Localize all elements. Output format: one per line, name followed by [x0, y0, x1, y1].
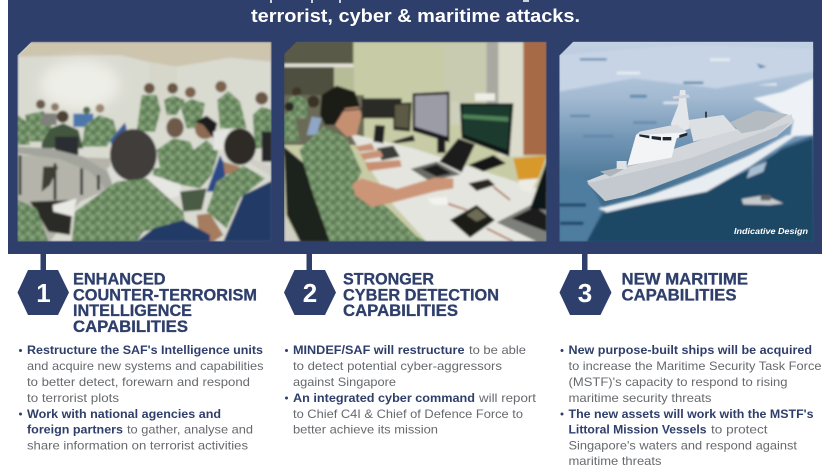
bullet text 1: to better detect, forewarn and respond [27, 375, 250, 389]
bullet text 3: to increase the Maritime Security Task Force [568, 359, 822, 373]
icon: hexagon number 1: 1 [36, 278, 51, 308]
bullet text 2: to Chief C4I & Chief of Defence Force to [293, 407, 523, 421]
icon: hexagon number 2 [284, 254, 336, 315]
bullet text 1: to gather, analyse and [127, 422, 253, 436]
bullet text 2: against Singapore [293, 375, 396, 389]
heading 2: STRONGER [343, 270, 434, 288]
photo: intelligence briefing room [17, 42, 272, 242]
heading 1: INTELLIGENCE [73, 302, 192, 320]
bullet text 2: better achieve its mission [293, 422, 438, 436]
bullet text 2: to detect potential cyber-aggressors [293, 359, 502, 373]
section 1: counter-terrorism intelligence [18, 254, 264, 452]
heading 2: CYBER DETECTION [343, 286, 499, 304]
bullet text 1 [19, 343, 264, 452]
bullet text 2 [285, 343, 537, 436]
bullet text 1: to terrorist plots [27, 391, 119, 405]
bullet text 2: MINDEF/SAF will restructure [293, 343, 465, 357]
bullet text 1: share information on terrorist activities [27, 438, 248, 452]
bullet text 1: and acquire new systems and capabilities [27, 359, 264, 373]
heading 2 [343, 270, 499, 320]
bullet text 3: The new assets will work with the MSTF's [568, 407, 814, 421]
bullet text 2: to be able [469, 343, 526, 357]
bullet text 3: (MSTF)'s capacity to respond to rising [568, 375, 788, 389]
icon: hexagon number 3 [560, 254, 612, 315]
heading 3 [622, 270, 748, 304]
bullet text 2: An integrated cyber command [293, 391, 475, 405]
heading 1: COUNTER-TERRORISM [73, 286, 257, 304]
caption: Indicative Design: Indicative Design [734, 226, 808, 236]
bullet text 3: maritime threats [568, 454, 662, 468]
photo: cyber operations desk [284, 42, 547, 242]
icon: hexagon number 3: 3 [578, 278, 592, 308]
heading 3: CAPABILITIES [622, 286, 736, 304]
heading 3: NEW MARITIME [622, 270, 748, 288]
section 3: maritime capabilities [560, 254, 822, 468]
bullet text 1: Work with national agencies and [27, 407, 221, 421]
icon: hexagon number 1 [18, 254, 69, 315]
bullet text 1: foreign partners [27, 422, 123, 436]
bullet text 3 [560, 343, 822, 468]
section 2: cyber detection [284, 254, 537, 436]
bullet text 3: Singapore's waters and respond against [568, 438, 798, 452]
bullet text 3: maritime security threats [568, 391, 712, 405]
heading 1 [73, 270, 257, 336]
bullet text 3: Littoral Mission Vessels [568, 422, 707, 436]
title: terrorist, cyber & maritime attacks. [251, 6, 580, 26]
icon: hexagon number 2: 2 [303, 278, 317, 308]
heading 1: ENHANCED [73, 270, 166, 288]
heading 1: CAPABILITIES [73, 318, 188, 336]
bullet text 1: Restructure the SAF's Intelligence units [27, 343, 263, 357]
photo: littoral ship illustration [559, 42, 813, 242]
bullet text 3: to protect [711, 422, 768, 436]
bullet text 2: will report [478, 391, 537, 405]
heading 2: CAPABILITIES [343, 302, 458, 320]
bullet text 3: New purpose-built ships will be acquired [568, 343, 812, 357]
